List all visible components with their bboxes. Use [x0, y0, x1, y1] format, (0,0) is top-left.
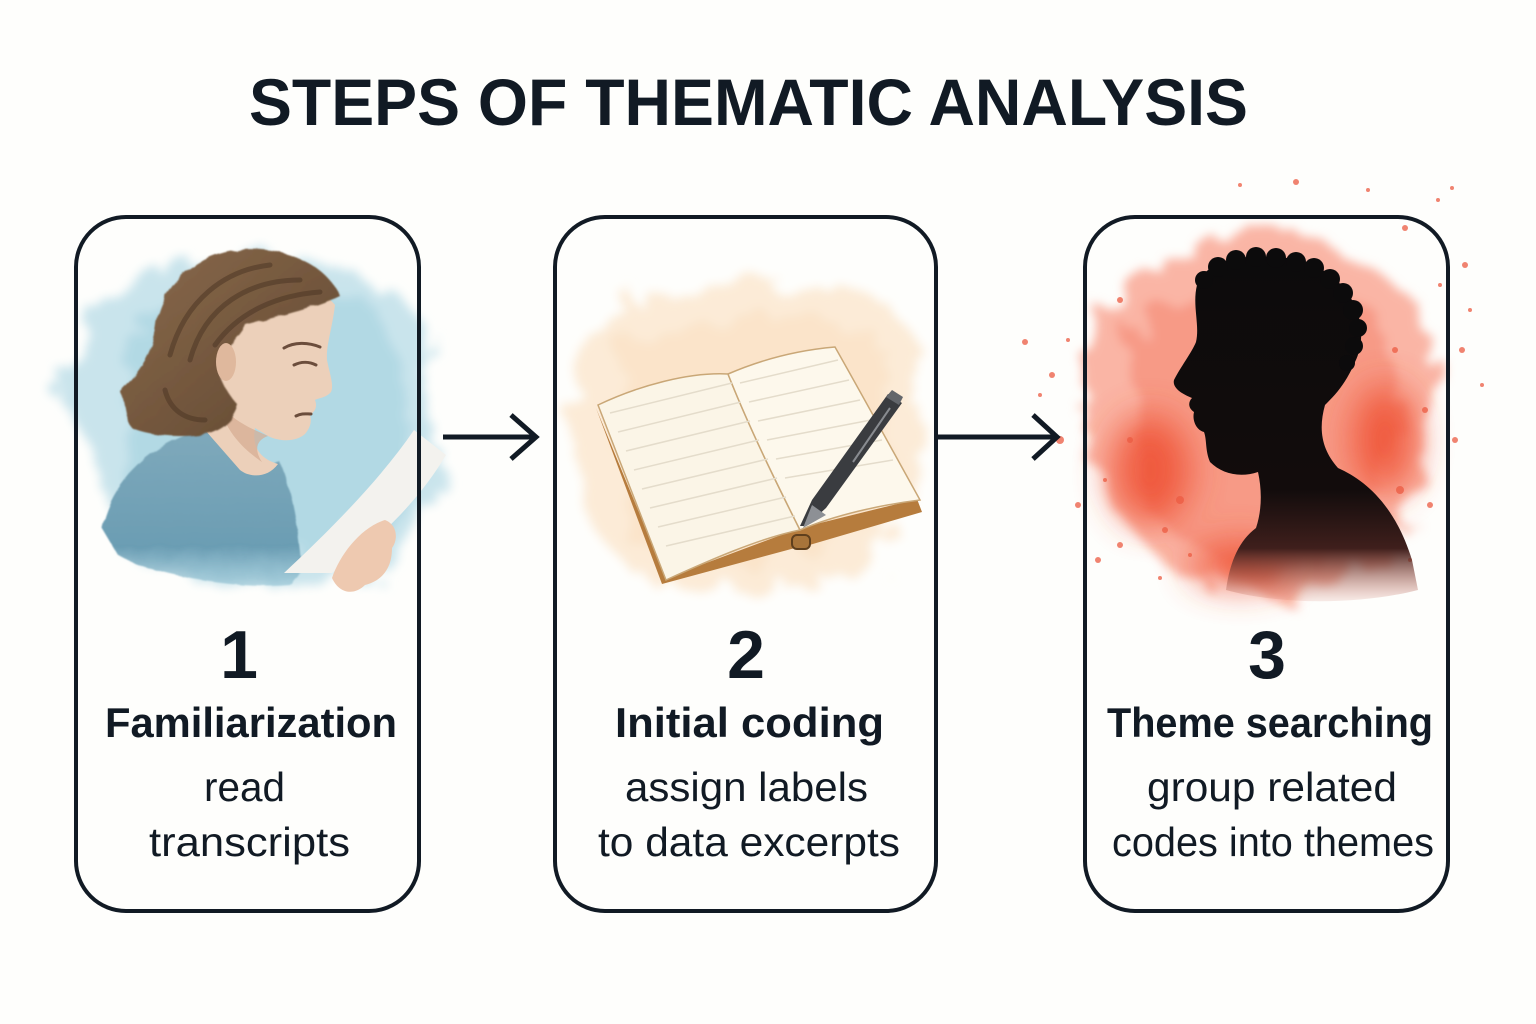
card 3 outline — [1085, 217, 1448, 911]
illustration: open notebook and pen — [570, 280, 922, 590]
hair — [120, 249, 340, 436]
arrow: step 2 to step 3 — [938, 415, 1057, 459]
card 1 number: 1 — [220, 617, 258, 693]
curly hair bumps — [1195, 247, 1367, 371]
face and neck — [205, 289, 335, 475]
card 1: familiarization — [76, 217, 419, 911]
ruled lines — [610, 360, 893, 546]
card 3 description — [1112, 764, 1434, 865]
card 1 description: transcripts — [149, 819, 350, 865]
card 2 description — [598, 764, 900, 865]
left page — [598, 374, 800, 580]
card 2 heading: Initial coding — [615, 699, 884, 746]
book clasp — [792, 535, 810, 549]
card 3 description: group related — [1147, 764, 1397, 810]
pen — [800, 390, 903, 528]
card 2: initial coding — [555, 217, 936, 911]
hand — [332, 520, 396, 592]
card 2 description: to data excerpts — [598, 819, 900, 865]
book cover — [596, 408, 922, 584]
ear — [216, 343, 236, 381]
peach watercolor wash — [570, 280, 920, 590]
neck shadow — [218, 400, 268, 462]
silhouette hair and head — [1174, 247, 1418, 601]
card 3: theme searching — [1085, 217, 1448, 911]
card 2 number: 2 — [727, 617, 765, 693]
red watercolor wash — [1085, 225, 1435, 600]
title: STEPS OF THEMATIC ANALYSIS — [249, 65, 1248, 139]
card 2 description: assign labels — [625, 764, 868, 810]
card 1 description: read — [204, 764, 285, 810]
arrow: step 1 to step 2 — [443, 415, 536, 459]
right page — [728, 347, 920, 530]
card 1 outline — [76, 217, 419, 911]
illustration: person reading — [60, 249, 446, 592]
card 3 heading: Theme searching — [1107, 699, 1433, 746]
shirt — [102, 428, 302, 586]
card 1 description — [149, 764, 350, 865]
paint splatter — [1022, 179, 1484, 580]
hair strands — [165, 265, 320, 420]
card 3 number: 3 — [1248, 617, 1286, 693]
card 1 heading: Familiarization — [105, 699, 397, 746]
card 3 description: codes into themes — [1112, 819, 1434, 865]
card 2 outline — [555, 217, 936, 911]
facial features — [284, 343, 320, 416]
paper sheet — [284, 430, 446, 573]
illustration: silhouette in red wash — [1022, 179, 1484, 601]
blue watercolor wash — [60, 255, 445, 590]
deep red blooms — [1110, 385, 1417, 587]
